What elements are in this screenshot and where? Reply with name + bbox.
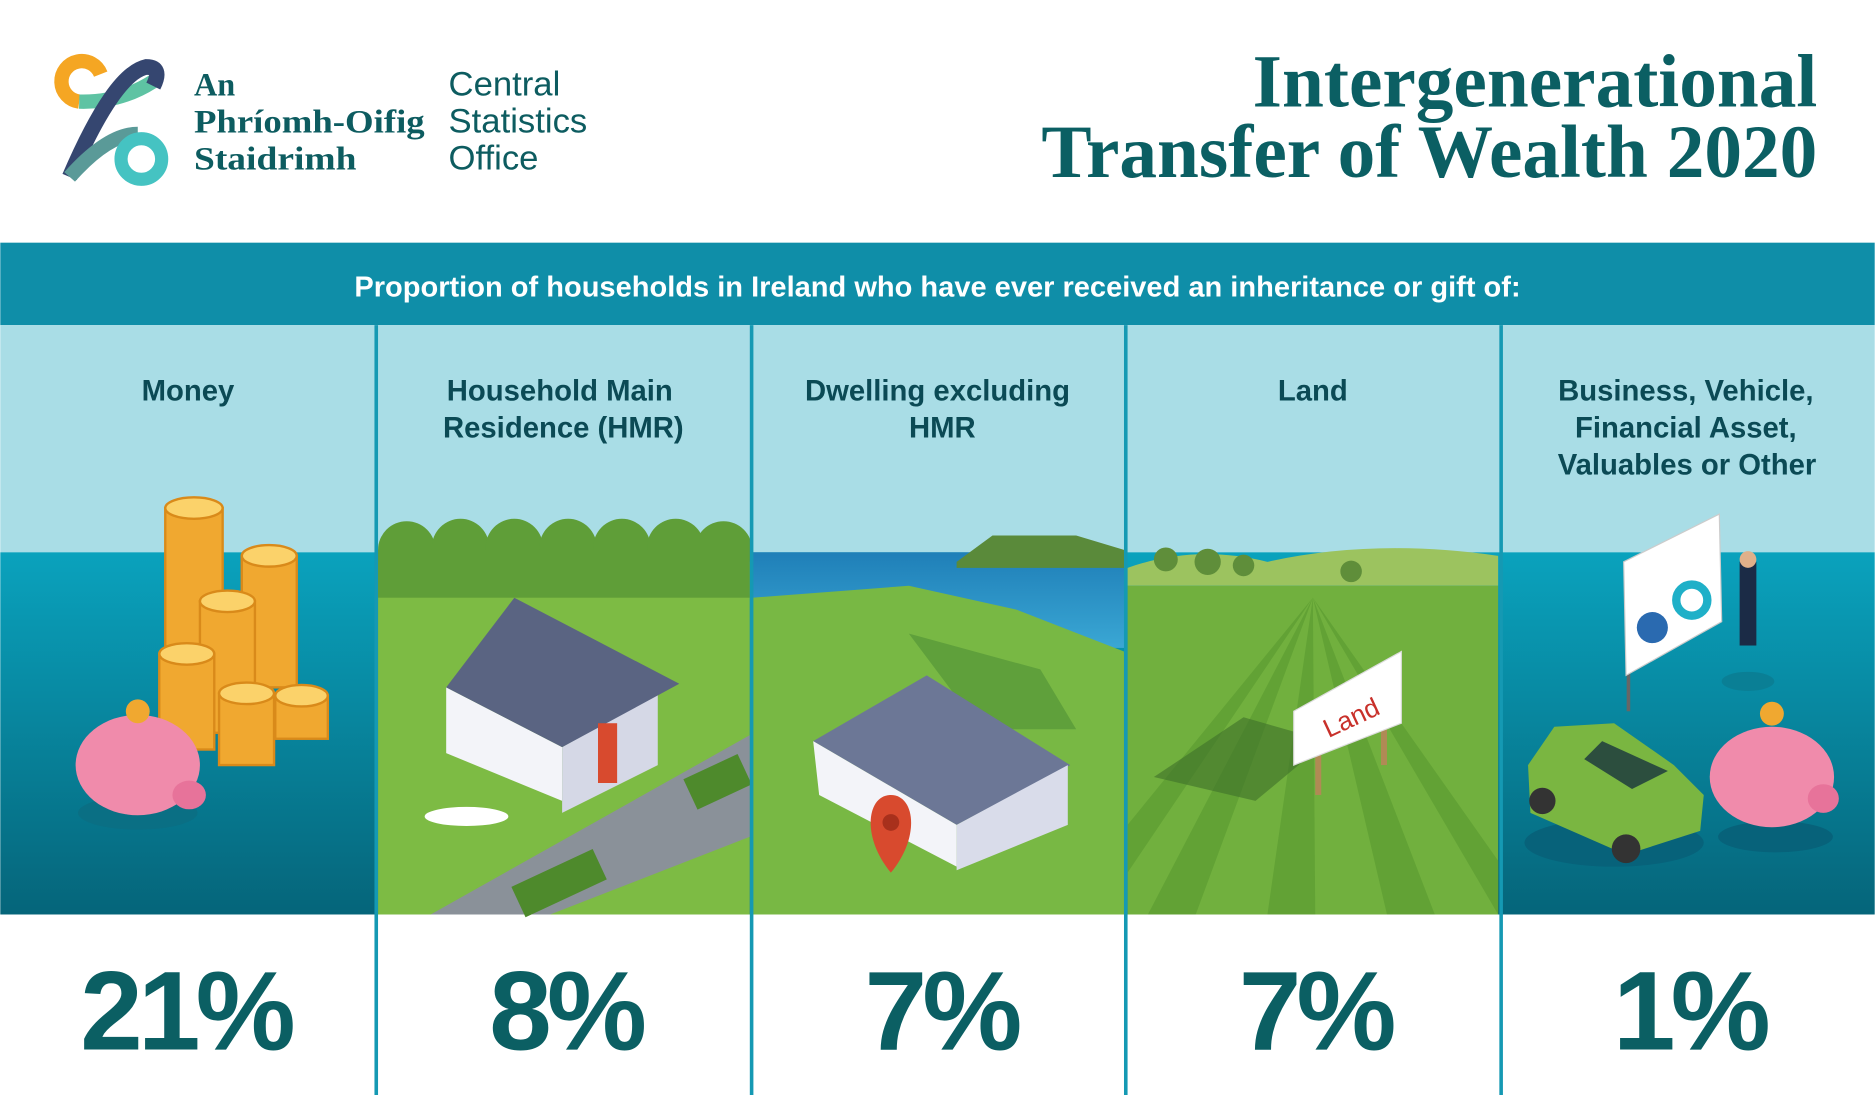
panel: money: Money: [142, 374, 235, 407]
percentages: 7%: [865, 948, 1019, 1074]
logo: [61, 61, 587, 179]
title: Intergenerational: [1253, 40, 1817, 123]
icon: land sign: [1154, 652, 1401, 801]
logo: Central: [449, 66, 560, 104]
percentages: 8%: [489, 948, 644, 1074]
percentages: 7%: [1239, 948, 1394, 1074]
icon: house with pin: [813, 675, 1070, 873]
logo: Statistics: [449, 103, 587, 141]
panel: business: Financial Asset,: [1575, 412, 1797, 445]
panel: business: Business, Vehicle,: [1558, 374, 1814, 407]
percentages: 1%: [1613, 948, 1768, 1074]
panel: HMR: [378, 374, 752, 917]
panel: business: [1524, 374, 1839, 867]
panel: business: Valuables or Other: [1558, 449, 1816, 482]
logo: An: [194, 67, 235, 103]
panel: land: [1128, 374, 1498, 914]
dividers: [376, 325, 1501, 1095]
panel: land: Land: [1278, 374, 1348, 407]
panel: dwelling: Dwelling excluding: [805, 374, 1070, 407]
icon: house: [425, 598, 679, 826]
panel: dwelling: HMR: [909, 412, 976, 445]
title: [1041, 40, 1817, 194]
icon: land sign: Land: [1318, 692, 1384, 744]
banner: Proportion of households in Ireland who have ever received an inheritance or gift of:: [354, 271, 1521, 303]
logo: Office: [449, 140, 538, 178]
banner: [0, 243, 1875, 325]
panel backgrounds: [0, 325, 1875, 914]
percentages: 21%: [80, 948, 293, 1074]
logo: Phríomh-Oifig: [194, 104, 425, 140]
logo: Staidrimh: [194, 141, 357, 177]
icon: presentation board: [1624, 514, 1774, 711]
panel: dwelling: [752, 374, 1124, 914]
icon: car: [1524, 723, 1704, 867]
icon: piggy bank: [1710, 702, 1839, 852]
panel: money: [76, 374, 328, 830]
panel: HMR: Household Main: [447, 374, 673, 407]
icon: coin stacks: [159, 497, 328, 765]
percentages: [80, 948, 1768, 1074]
title: Transfer of Wealth 2020: [1041, 111, 1817, 194]
icon: piggy bank: [76, 699, 206, 830]
panel: HMR: Residence (HMR): [443, 412, 684, 445]
